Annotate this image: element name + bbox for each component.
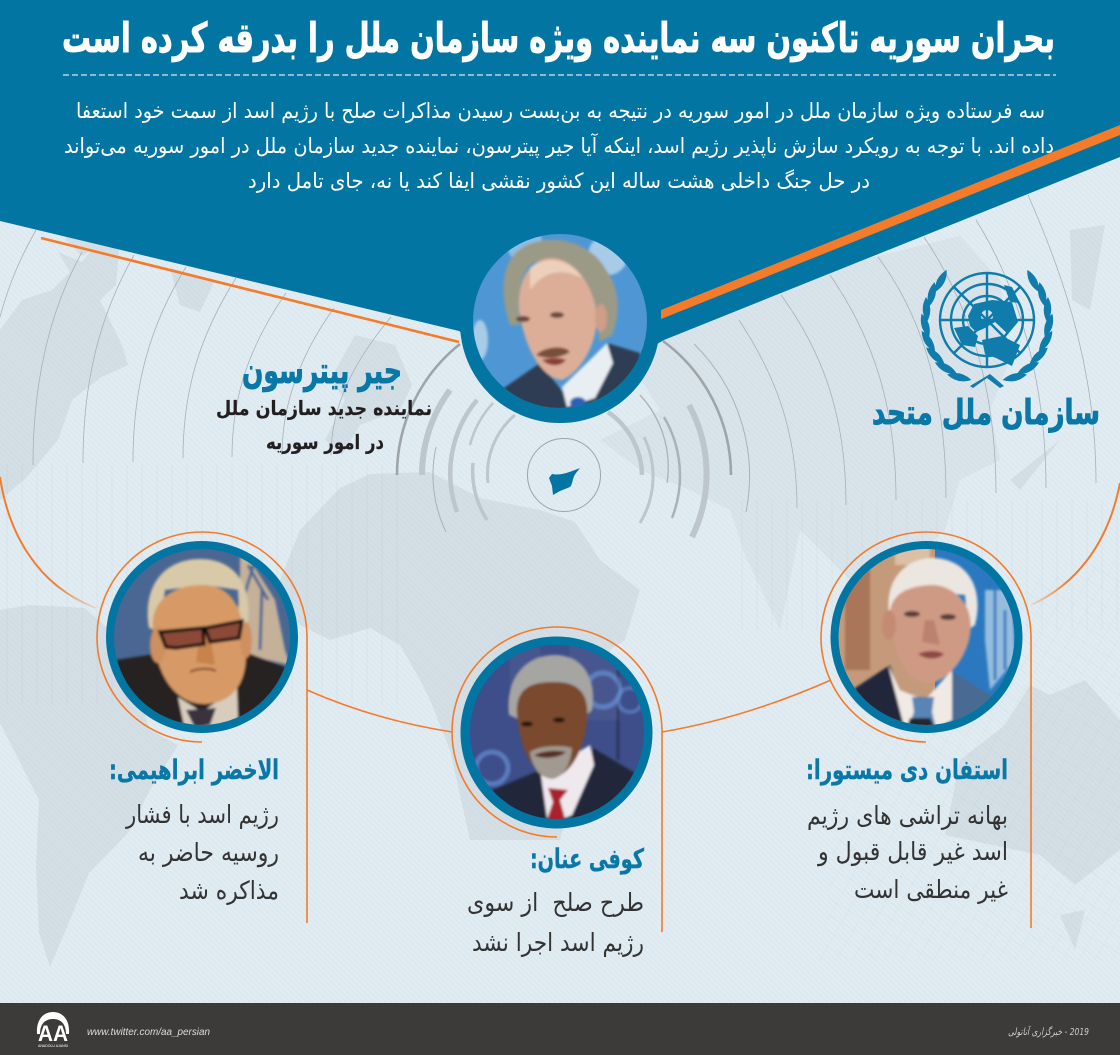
quote: Annan: طرح صلح از سوی	[467, 888, 644, 918]
quote: Annan	[467, 888, 644, 958]
portrait: de Mistura	[838, 549, 1014, 725]
world map	[0, 222, 1120, 967]
card: Staffan de Mistura	[806, 532, 1031, 928]
quote: de Mistura	[807, 801, 1008, 904]
map grid lines	[0, 195, 1120, 960]
intro paragraph	[64, 99, 1054, 193]
quote: Brahimi: مذاکره شد	[179, 876, 279, 905]
portrait: Brahimi	[110, 545, 295, 730]
portrait: Annan	[470, 645, 644, 819]
icon: UN emblem	[918, 268, 1056, 388]
quote: Brahimi: روسیه حاضر به	[138, 838, 279, 868]
role: Pedersen: نماینده جدید سازمان ملل	[216, 396, 432, 420]
quote: de Mistura: غیر منطقی است	[854, 875, 1008, 904]
dashed divider	[63, 74, 1056, 76]
Syria circle and map	[528, 438, 600, 512]
orange line left	[41, 238, 459, 342]
quote: de Mistura: اسد غیر قابل قبول و	[816, 837, 1008, 867]
icon: AA logo: ANADOLU AJANSI	[38, 1044, 68, 1048]
icon: AA logo: AA	[38, 1021, 68, 1046]
connector: Brahimi to Annan	[307, 690, 452, 732]
header banner	[0, 0, 1120, 400]
role: Pedersen: در امور سوریه	[266, 430, 384, 454]
quote: Brahimi: رژیم اسد با فشار	[124, 800, 279, 830]
radar arcs around Syria	[397, 341, 750, 537]
quote: Annan: رژیم اسد اجرا نشد	[472, 928, 644, 958]
name: de Mistura: استفان دی میستورا:	[806, 755, 1008, 786]
quote: Brahimi	[124, 800, 279, 905]
orange band right	[661, 125, 1120, 319]
credit: 2019 - خبرگزاری آناتولی	[1008, 1025, 1089, 1038]
quote: de Mistura: بهانه تراشی های رژیم	[807, 801, 1008, 831]
card: Kofi Annan	[452, 627, 662, 958]
role: Pedersen	[216, 396, 432, 454]
portrait: Geir Pedersen	[460, 223, 660, 423]
icon: AA logo	[37, 1012, 69, 1048]
connector: left sweep	[0, 477, 96, 608]
name: Brahimi: الاخضر ابراهیمی:	[109, 755, 279, 786]
connector: right sweep	[1031, 483, 1120, 605]
intro paragraph: داده اند. با توجه به رویکرد سازش ناپذیر رژیم اسد، اینکه آیا جیر پیترسون، نماینده جدید سازمان ملل در امور سوریه می‌تواند	[64, 133, 1054, 159]
footer bar	[0, 1003, 1120, 1055]
website: www.twitter.com/aa_persian	[87, 1027, 210, 1038]
card: Lakhdar Brahimi	[97, 532, 307, 923]
connector: Annan to de Mistura	[662, 680, 831, 732]
name: Annan: کوفی عنان:	[530, 844, 644, 875]
intro paragraph: در حل جنگ داخلی هشت ساله این کشور نقشی ایفا کند یا نه، جای تامل دارد	[248, 169, 870, 193]
intro paragraph: سه فرستاده ویژه سازمان ملل در امور سوریه در نتیجه به بن‌بست رسیدن مذاکرات صلح با رژیم اسد از سمت خود استعفا	[76, 99, 1045, 124]
name: Pedersen: جیر پیترسون	[242, 351, 402, 392]
